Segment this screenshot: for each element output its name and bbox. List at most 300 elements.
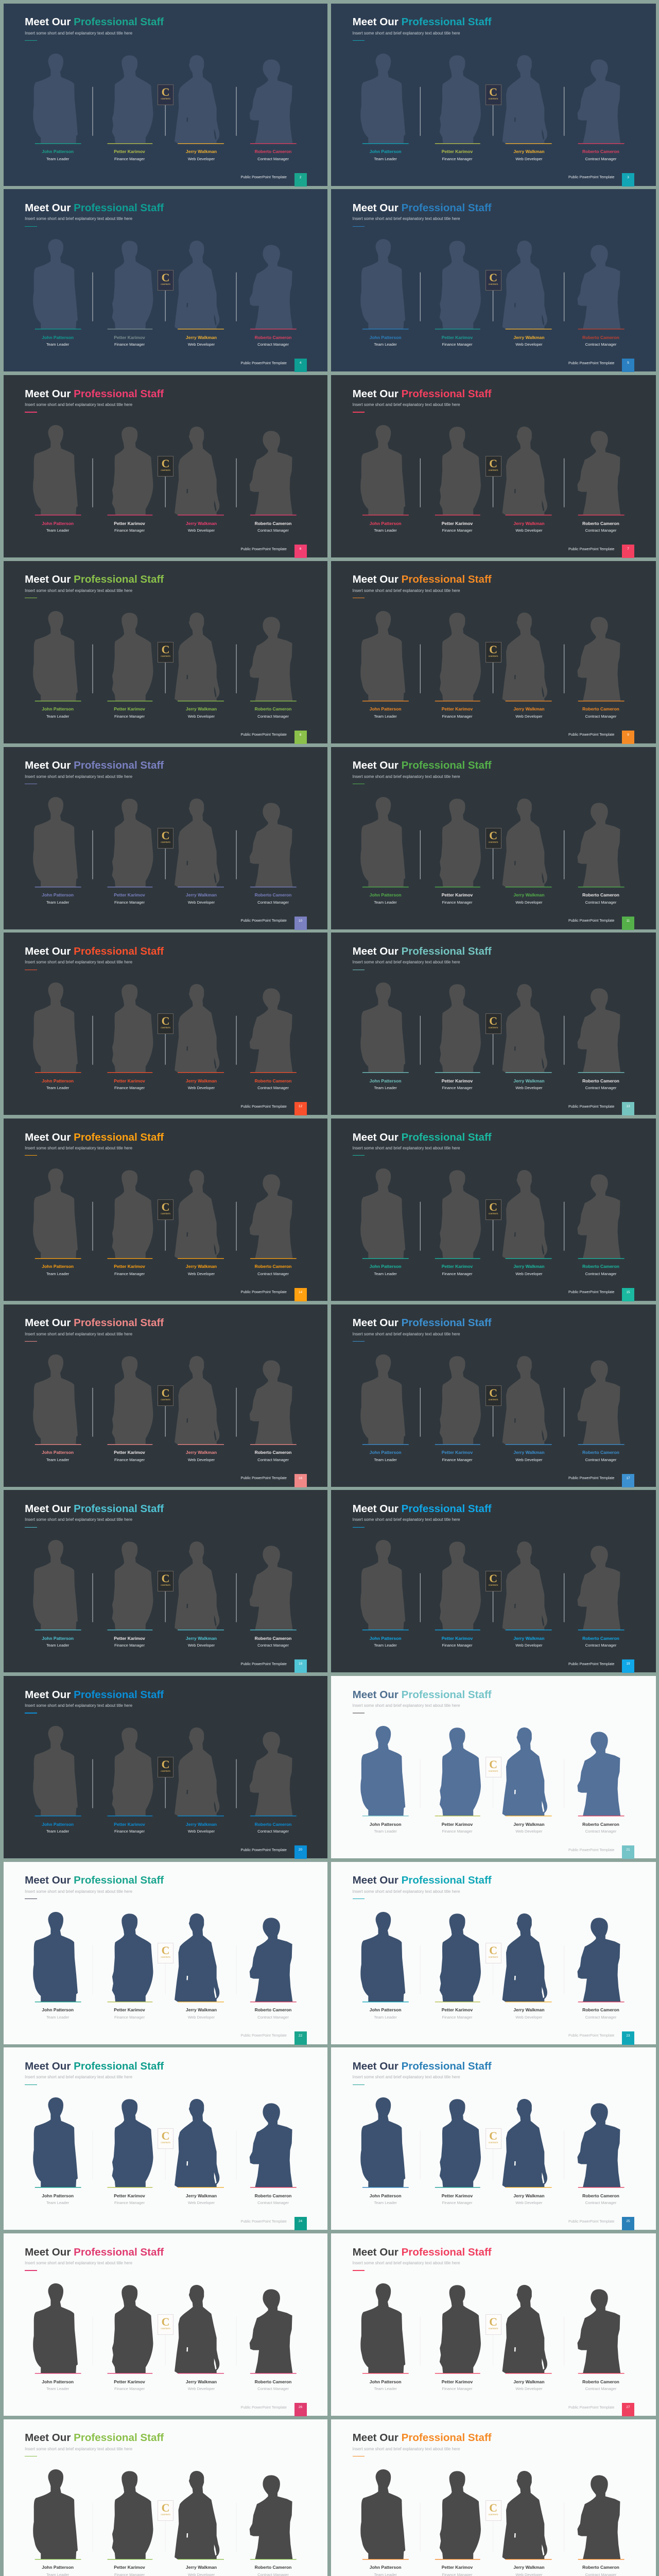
panel: slide 21: Contract Manager [585, 1829, 616, 1834]
panel: slide 10: Jerry Walkman [186, 892, 217, 897]
logo [485, 1013, 501, 1034]
panel: slide 15: John Patterson [370, 1264, 402, 1269]
panel: slide 29 [331, 2419, 656, 2576]
logo: CONTENTS [161, 2142, 170, 2144]
panel: slide 12 [3, 933, 327, 1115]
page number [622, 916, 634, 929]
panel: slide 3: John Patterson [370, 149, 402, 154]
subtitle: Insert some short and brief explanatory text about title here [25, 960, 132, 964]
panel: slide 24: Roberto Cameron [255, 2193, 291, 2198]
staff silhouettes [360, 797, 625, 887]
logo: C [162, 1758, 170, 1771]
subtitle: Insert some short and brief explanatory text about title here [25, 2261, 132, 2265]
panel: slide 12: Jerry Walkman [186, 1078, 217, 1083]
staff names [42, 521, 291, 533]
panel: slide 15 [331, 1118, 656, 1301]
logo [485, 456, 501, 477]
panel: slide 4: Finance Manager [114, 342, 145, 347]
logo: CONTENTS [161, 655, 170, 657]
page number: 17 [626, 1477, 630, 1480]
accent rule [353, 40, 365, 41]
logo: C [162, 828, 170, 842]
staff silhouettes [33, 982, 297, 1073]
panel: slide 13: Contract Manager [585, 1086, 616, 1090]
title: Meet Our Professional Staff [353, 1689, 492, 1701]
panel: slide 3 [331, 4, 656, 186]
staff names [331, 1489, 656, 1490]
footer label: Public PowerPoint Template [568, 1848, 614, 1852]
panel: slide 22: Roberto Cameron [255, 2007, 291, 2012]
panel: slide 6: Roberto Cameron [255, 521, 291, 526]
logo [485, 84, 501, 105]
page number: 4 [300, 361, 301, 365]
footer label: Public PowerPoint Template [241, 1476, 287, 1480]
panel: slide 9: Finance Manager [442, 714, 473, 719]
panel: slide 24: Web Developer [188, 2200, 215, 2205]
footer label: Public PowerPoint Template [241, 1662, 287, 1666]
subtitle: Insert some short and brief explanatory text about title here [25, 774, 132, 779]
panel: slide 2: Finance Manager [114, 157, 145, 161]
panel: slide 25: Petter Karimov [442, 2193, 473, 2198]
title: Meet Our Professional Staff [353, 202, 492, 214]
panel: slide 14: Roberto Cameron [255, 1264, 291, 1269]
logo: C [489, 1200, 497, 1213]
panel: slide 18: Contract Manager [257, 1643, 289, 1648]
panel: slide 27: Web Developer [515, 2386, 543, 2391]
staff names [42, 335, 291, 347]
panel: slide 2: Web Developer [188, 157, 215, 161]
staff silhouettes [360, 239, 625, 330]
page number: 24 [299, 2219, 302, 2223]
staff names [3, 1489, 327, 1490]
panel: slide 26 [3, 2233, 327, 2416]
logo: CONTENTS [161, 1399, 170, 1401]
staff names [370, 335, 619, 347]
title: Meet Our Professional Staff [25, 1317, 164, 1329]
panel: slide 26: Jerry Walkman [186, 2379, 217, 2384]
panel: slide 7: Jerry Walkman [513, 521, 545, 526]
logo [485, 1757, 501, 1777]
logo: C [489, 1386, 497, 1399]
page number: 15 [626, 1291, 630, 1294]
panel: slide 26: Team Leader [46, 2386, 69, 2391]
title: Meet Our Professional Staff [353, 1503, 492, 1515]
subtitle: Insert some short and brief explanatory text about title here [25, 1703, 132, 1708]
subtitle: Insert some short and brief explanatory text about title here [25, 1517, 132, 1522]
logo [158, 827, 174, 848]
panel: slide 21: Web Developer [515, 1829, 543, 1834]
title: Meet Our Professional Staff [353, 1131, 492, 1143]
panel: slide 8: Jerry Walkman [186, 706, 217, 711]
staff silhouettes [360, 611, 625, 702]
staff silhouettes [3, 1676, 327, 1858]
panel: slide 3: Finance Manager [442, 157, 473, 161]
staff silhouettes [3, 2233, 327, 2416]
panel: slide 3: Petter Karimov [442, 149, 473, 154]
subtitle: Insert some short and brief explanatory text about title here [25, 216, 132, 221]
panel: slide 4: Team Leader [46, 342, 69, 347]
panel: slide 27 [331, 2233, 656, 2416]
panel: slide 22: Team Leader [46, 2015, 69, 2020]
staff names [370, 149, 619, 161]
panel: slide 19: Finance Manager [442, 1643, 473, 1648]
panel: slide 26: Finance Manager [114, 2386, 145, 2391]
panel: slide 25: Jerry Walkman [513, 2193, 545, 2198]
panel: slide 24: Team Leader [46, 2200, 69, 2205]
page number [294, 2031, 307, 2045]
subtitle: Insert some short and brief explanatory text about title here [353, 216, 460, 221]
page number [294, 2403, 307, 2416]
panel: slide 13: John Patterson [370, 1078, 402, 1083]
subtitle: Insert some short and brief explanatory text about title here [353, 31, 460, 36]
page number [294, 173, 307, 187]
staff silhouettes [331, 1490, 656, 1672]
logo [485, 270, 501, 291]
panel: slide 13 [331, 933, 656, 1115]
footer label: Public PowerPoint Template [241, 361, 287, 365]
logo: CONTENTS [161, 469, 170, 471]
logo [485, 1199, 501, 1220]
page number [622, 1845, 634, 1859]
staff names [370, 706, 619, 719]
subtitle: Insert some short and brief explanatory text about title here [353, 1517, 460, 1522]
accent rule [25, 2084, 37, 2085]
logo: CONTENTS [161, 2328, 170, 2330]
logo [158, 642, 174, 663]
panel: slide 11: Web Developer [515, 900, 543, 905]
title: Meet Our Professional Staff [353, 1874, 492, 1886]
panel: slide 19 [331, 1490, 656, 1672]
panel: slide 8: John Patterson [42, 706, 74, 711]
subtitle: Insert some short and brief explanatory text about title here [353, 1889, 460, 1894]
logo: C [162, 86, 170, 98]
panel: slide 17: Finance Manager [442, 1458, 473, 1462]
subtitle: Insert some short and brief explanatory text about title here [25, 402, 132, 407]
panel: slide 15: Web Developer [515, 1272, 543, 1276]
page number: 18 [299, 1662, 302, 1666]
staff names [3, 2419, 327, 2420]
panel: slide 2: Jerry Walkman [186, 149, 217, 154]
panel: slide 21: John Patterson [370, 1822, 402, 1827]
staff silhouettes [360, 54, 625, 144]
staff names [42, 1078, 291, 1090]
footer label: Public PowerPoint Template [568, 2033, 614, 2038]
title: Meet Our Professional Staff [353, 759, 492, 771]
panel: slide 16: Web Developer [188, 1458, 215, 1462]
footer label: Public PowerPoint Template [568, 361, 614, 365]
panel: slide 9: Petter Karimov [442, 706, 473, 711]
logo [485, 2500, 501, 2521]
staff silhouettes [331, 1676, 656, 1858]
panel: slide 28: Petter Karimov [114, 2565, 145, 2570]
footer label: Public PowerPoint Template [568, 732, 614, 737]
panel: slide 25: Team Leader [374, 2200, 397, 2205]
panel: slide 22: Finance Manager [114, 2015, 145, 2020]
staff silhouettes [360, 425, 625, 515]
panel: slide 3: Contract Manager [585, 157, 616, 161]
staff silhouettes [360, 982, 625, 1073]
panel: slide 5: Petter Karimov [442, 335, 473, 340]
panel: slide 20 [3, 1676, 327, 1858]
panel: slide 24: Petter Karimov [114, 2193, 145, 2198]
logo [158, 456, 174, 477]
panel: slide 19: Roberto Cameron [582, 1636, 619, 1641]
logo: CONTENTS [161, 98, 170, 100]
staff silhouettes [331, 1304, 656, 1487]
panel: slide 15: Contract Manager [585, 1272, 616, 1276]
footer label: Public PowerPoint Template [568, 175, 614, 179]
logo [158, 1013, 174, 1034]
subtitle: Insert some short and brief explanatory text about title here [25, 1889, 132, 1894]
panel: slide 15: Finance Manager [442, 1272, 473, 1276]
page number [294, 1474, 307, 1487]
panel: slide 2: Contract Manager [257, 157, 289, 161]
panel: slide 9: Team Leader [374, 714, 397, 719]
title: Meet Our Professional Staff [25, 573, 164, 585]
panel: slide 11: Team Leader [374, 900, 397, 905]
panel: slide 20: Team Leader [46, 1829, 69, 1834]
logo [485, 1385, 501, 1406]
logo: C [489, 2501, 497, 2514]
panel: slide 9: Web Developer [515, 714, 543, 719]
panel: slide 22: Contract Manager [257, 2015, 289, 2020]
logo [158, 84, 174, 105]
panel: slide 18: Team Leader [46, 1643, 69, 1648]
accent rule [353, 1527, 365, 1528]
panel: slide 20: Finance Manager [114, 1829, 145, 1834]
staff silhouettes [33, 611, 297, 702]
panel: slide 23: Jerry Walkman [513, 2007, 545, 2012]
panel: slide 10: Roberto Cameron [255, 892, 291, 897]
accent rule [25, 1155, 37, 1156]
footer label: Public PowerPoint Template [568, 1290, 614, 1294]
footer label: Public PowerPoint Template [241, 2033, 287, 2038]
staff silhouettes [33, 797, 297, 887]
logo: CONTENTS [489, 841, 498, 843]
accent rule [353, 2270, 365, 2271]
panel: slide 15: Team Leader [374, 1272, 397, 1276]
panel: slide 4: Web Developer [188, 342, 215, 347]
subtitle: Insert some short and brief explanatory text about title here [25, 31, 132, 36]
panel: slide 18: John Patterson [42, 1636, 74, 1641]
logo [485, 642, 501, 663]
panel: slide 5: Contract Manager [585, 342, 616, 347]
logo: CONTENTS [161, 1956, 170, 1958]
logo: CONTENTS [489, 469, 498, 471]
panel: slide 8: Roberto Cameron [255, 706, 291, 711]
panel: slide 23: Team Leader [374, 2015, 397, 2020]
staff silhouettes [331, 1118, 656, 1301]
panel: slide 19: Team Leader [374, 1643, 397, 1648]
staff silhouettes [331, 2047, 656, 2230]
panel: slide 8: Web Developer [188, 714, 215, 719]
footer label: Public PowerPoint Template [241, 547, 287, 551]
panel: slide 26: Petter Karimov [114, 2379, 145, 2384]
panel: slide 25: Web Developer [515, 2200, 543, 2205]
logo: C [489, 1758, 497, 1771]
subtitle: Insert some short and brief explanatory text about title here [353, 2075, 460, 2079]
accent rule [353, 1341, 365, 1342]
panel: slide 18: Jerry Walkman [186, 1636, 217, 1641]
panel: slide 23: John Patterson [370, 2007, 402, 2012]
subtitle: Insert some short and brief explanatory text about title here [25, 1332, 132, 1336]
page number: 6 [300, 547, 301, 551]
panel: slide 10: Web Developer [188, 900, 215, 905]
logo: C [489, 2129, 497, 2142]
panel: slide 16: Team Leader [46, 1458, 69, 1462]
panel: slide 26: Web Developer [188, 2386, 215, 2391]
logo: C [162, 1014, 170, 1027]
panel: slide 7: Team Leader [374, 528, 397, 533]
logo: CONTENTS [489, 283, 498, 285]
panel: slide 20: Web Developer [188, 1829, 215, 1834]
page number: 22 [299, 2034, 302, 2038]
panel: slide 5: John Patterson [370, 335, 402, 340]
subtitle: Insert some short and brief explanatory text about title here [353, 2261, 460, 2265]
panel: slide 15: Petter Karimov [442, 1264, 473, 1269]
title: Meet Our Professional Staff [353, 945, 492, 957]
staff silhouettes [3, 2419, 327, 2576]
staff silhouettes [33, 425, 297, 515]
panel: slide 22 [3, 1862, 327, 2044]
page number: 11 [627, 919, 630, 922]
staff names [370, 892, 619, 905]
panel: slide 20: Contract Manager [257, 1829, 289, 1834]
subtitle: Insert some short and brief explanatory text about title here [353, 1146, 460, 1150]
logo: C [162, 457, 170, 470]
logo: CONTENTS [489, 1399, 498, 1401]
page number: 14 [299, 1291, 302, 1294]
panel: slide 17: Web Developer [515, 1458, 543, 1462]
panel: slide 11: Finance Manager [442, 900, 473, 905]
panel: slide 18 [3, 1490, 327, 1672]
page number: 25 [626, 2219, 630, 2223]
staff names [370, 521, 619, 533]
panel: slide 20: Petter Karimov [114, 1822, 145, 1827]
staff names [42, 892, 291, 905]
panel: slide 28: Jerry Walkman [186, 2565, 217, 2570]
logo: C [162, 1200, 170, 1213]
subtitle: Insert some short and brief explanatory text about title here [25, 588, 132, 593]
footer label: Public PowerPoint Template [241, 732, 287, 737]
title: Meet Our Professional Staff [25, 945, 164, 957]
staff silhouettes [3, 1304, 327, 1487]
panel: slide 14: Finance Manager [114, 1272, 145, 1276]
logo: CONTENTS [489, 1584, 498, 1586]
page number [622, 173, 634, 187]
panel: slide 18: Roberto Cameron [255, 1636, 291, 1641]
panel: slide 5 [331, 189, 656, 371]
accent rule [25, 1341, 37, 1342]
panel: slide 20: Roberto Cameron [255, 1822, 291, 1827]
page number: 3 [627, 176, 629, 179]
panel: slide 6: Petter Karimov [114, 521, 145, 526]
logo [485, 1571, 501, 1591]
panel: slide 4: Contract Manager [257, 342, 289, 347]
panel: slide 23: Petter Karimov [442, 2007, 473, 2012]
logo [158, 2500, 174, 2521]
staff silhouettes [3, 2047, 327, 2230]
page number [294, 2217, 307, 2230]
panel: slide 27: John Patterson [370, 2379, 402, 2384]
logo [158, 1943, 174, 1963]
panel: slide 6: Team Leader [46, 528, 69, 533]
footer label: Public PowerPoint Template [568, 918, 614, 923]
panel: slide 22: Jerry Walkman [186, 2007, 217, 2012]
title: Meet Our Professional Staff [25, 759, 164, 771]
accent rule [353, 1713, 365, 1714]
logo: CONTENTS [161, 1584, 170, 1586]
panel: slide 19: Contract Manager [585, 1643, 616, 1648]
panel: slide 28 [3, 2419, 327, 2576]
accent rule [353, 2084, 365, 2085]
logo [158, 2128, 174, 2149]
page number: 26 [299, 2405, 302, 2409]
logo [158, 1199, 174, 1220]
logo: CONTENTS [489, 1770, 498, 1772]
panel: slide 14 [3, 1118, 327, 1301]
footer label: Public PowerPoint Template [241, 1848, 287, 1852]
panel: slide 8: Petter Karimov [114, 706, 145, 711]
logo: C [489, 828, 497, 842]
panel: slide 10: John Patterson [42, 892, 74, 897]
subtitle: Insert some short and brief explanatory text about title here [353, 2447, 460, 2451]
panel: slide 13: Team Leader [374, 1086, 397, 1090]
logo: C [162, 2315, 170, 2328]
panel: slide 7 [331, 375, 656, 557]
panel: slide 28: Roberto Cameron [255, 2565, 291, 2570]
panel: slide 23: Finance Manager [442, 2015, 473, 2020]
panel: slide 13: Web Developer [515, 1086, 543, 1090]
footer label: Public PowerPoint Template [241, 2405, 287, 2410]
panel: slide 19: Web Developer [515, 1643, 543, 1648]
footer label: Public PowerPoint Template [568, 1476, 614, 1480]
page number [622, 731, 634, 744]
page number: 19 [626, 1662, 630, 1666]
panel: slide 12: Petter Karimov [114, 1078, 145, 1083]
panel: slide 12: Team Leader [46, 1086, 69, 1090]
subtitle: Insert some short and brief explanatory text about title here [353, 588, 460, 593]
accent rule [25, 40, 37, 41]
title: Meet Our Professional Staff [353, 2060, 492, 2072]
panel: slide 6: Web Developer [188, 528, 215, 533]
panel: slide 16: Roberto Cameron [255, 1450, 291, 1455]
page number: 27 [626, 2405, 630, 2409]
panel: slide 17: Jerry Walkman [513, 1450, 545, 1455]
logo [158, 2314, 174, 2335]
panel: slide 21 [331, 1676, 656, 1858]
logo: C [162, 1944, 170, 1957]
panel: slide 27: Petter Karimov [442, 2379, 473, 2384]
logo: C [162, 2501, 170, 2514]
panel: slide 25: Contract Manager [585, 2200, 616, 2205]
page number [622, 359, 634, 372]
footer label: Public PowerPoint Template [568, 547, 614, 551]
logo: C [162, 643, 170, 656]
panel: slide 17: Team Leader [374, 1458, 397, 1462]
title: Meet Our Professional Staff [353, 1317, 492, 1329]
logo: CONTENTS [161, 283, 170, 285]
logo: C [162, 271, 170, 284]
logo: C [489, 2315, 497, 2328]
panel: slide 16: Jerry Walkman [186, 1450, 217, 1455]
panel: slide 11 [331, 747, 656, 929]
page number [294, 545, 307, 558]
page number [622, 1288, 634, 1301]
panel: slide 23: Contract Manager [585, 2015, 616, 2020]
panel: slide 11: Petter Karimov [442, 892, 473, 897]
staff names [331, 2047, 656, 2048]
